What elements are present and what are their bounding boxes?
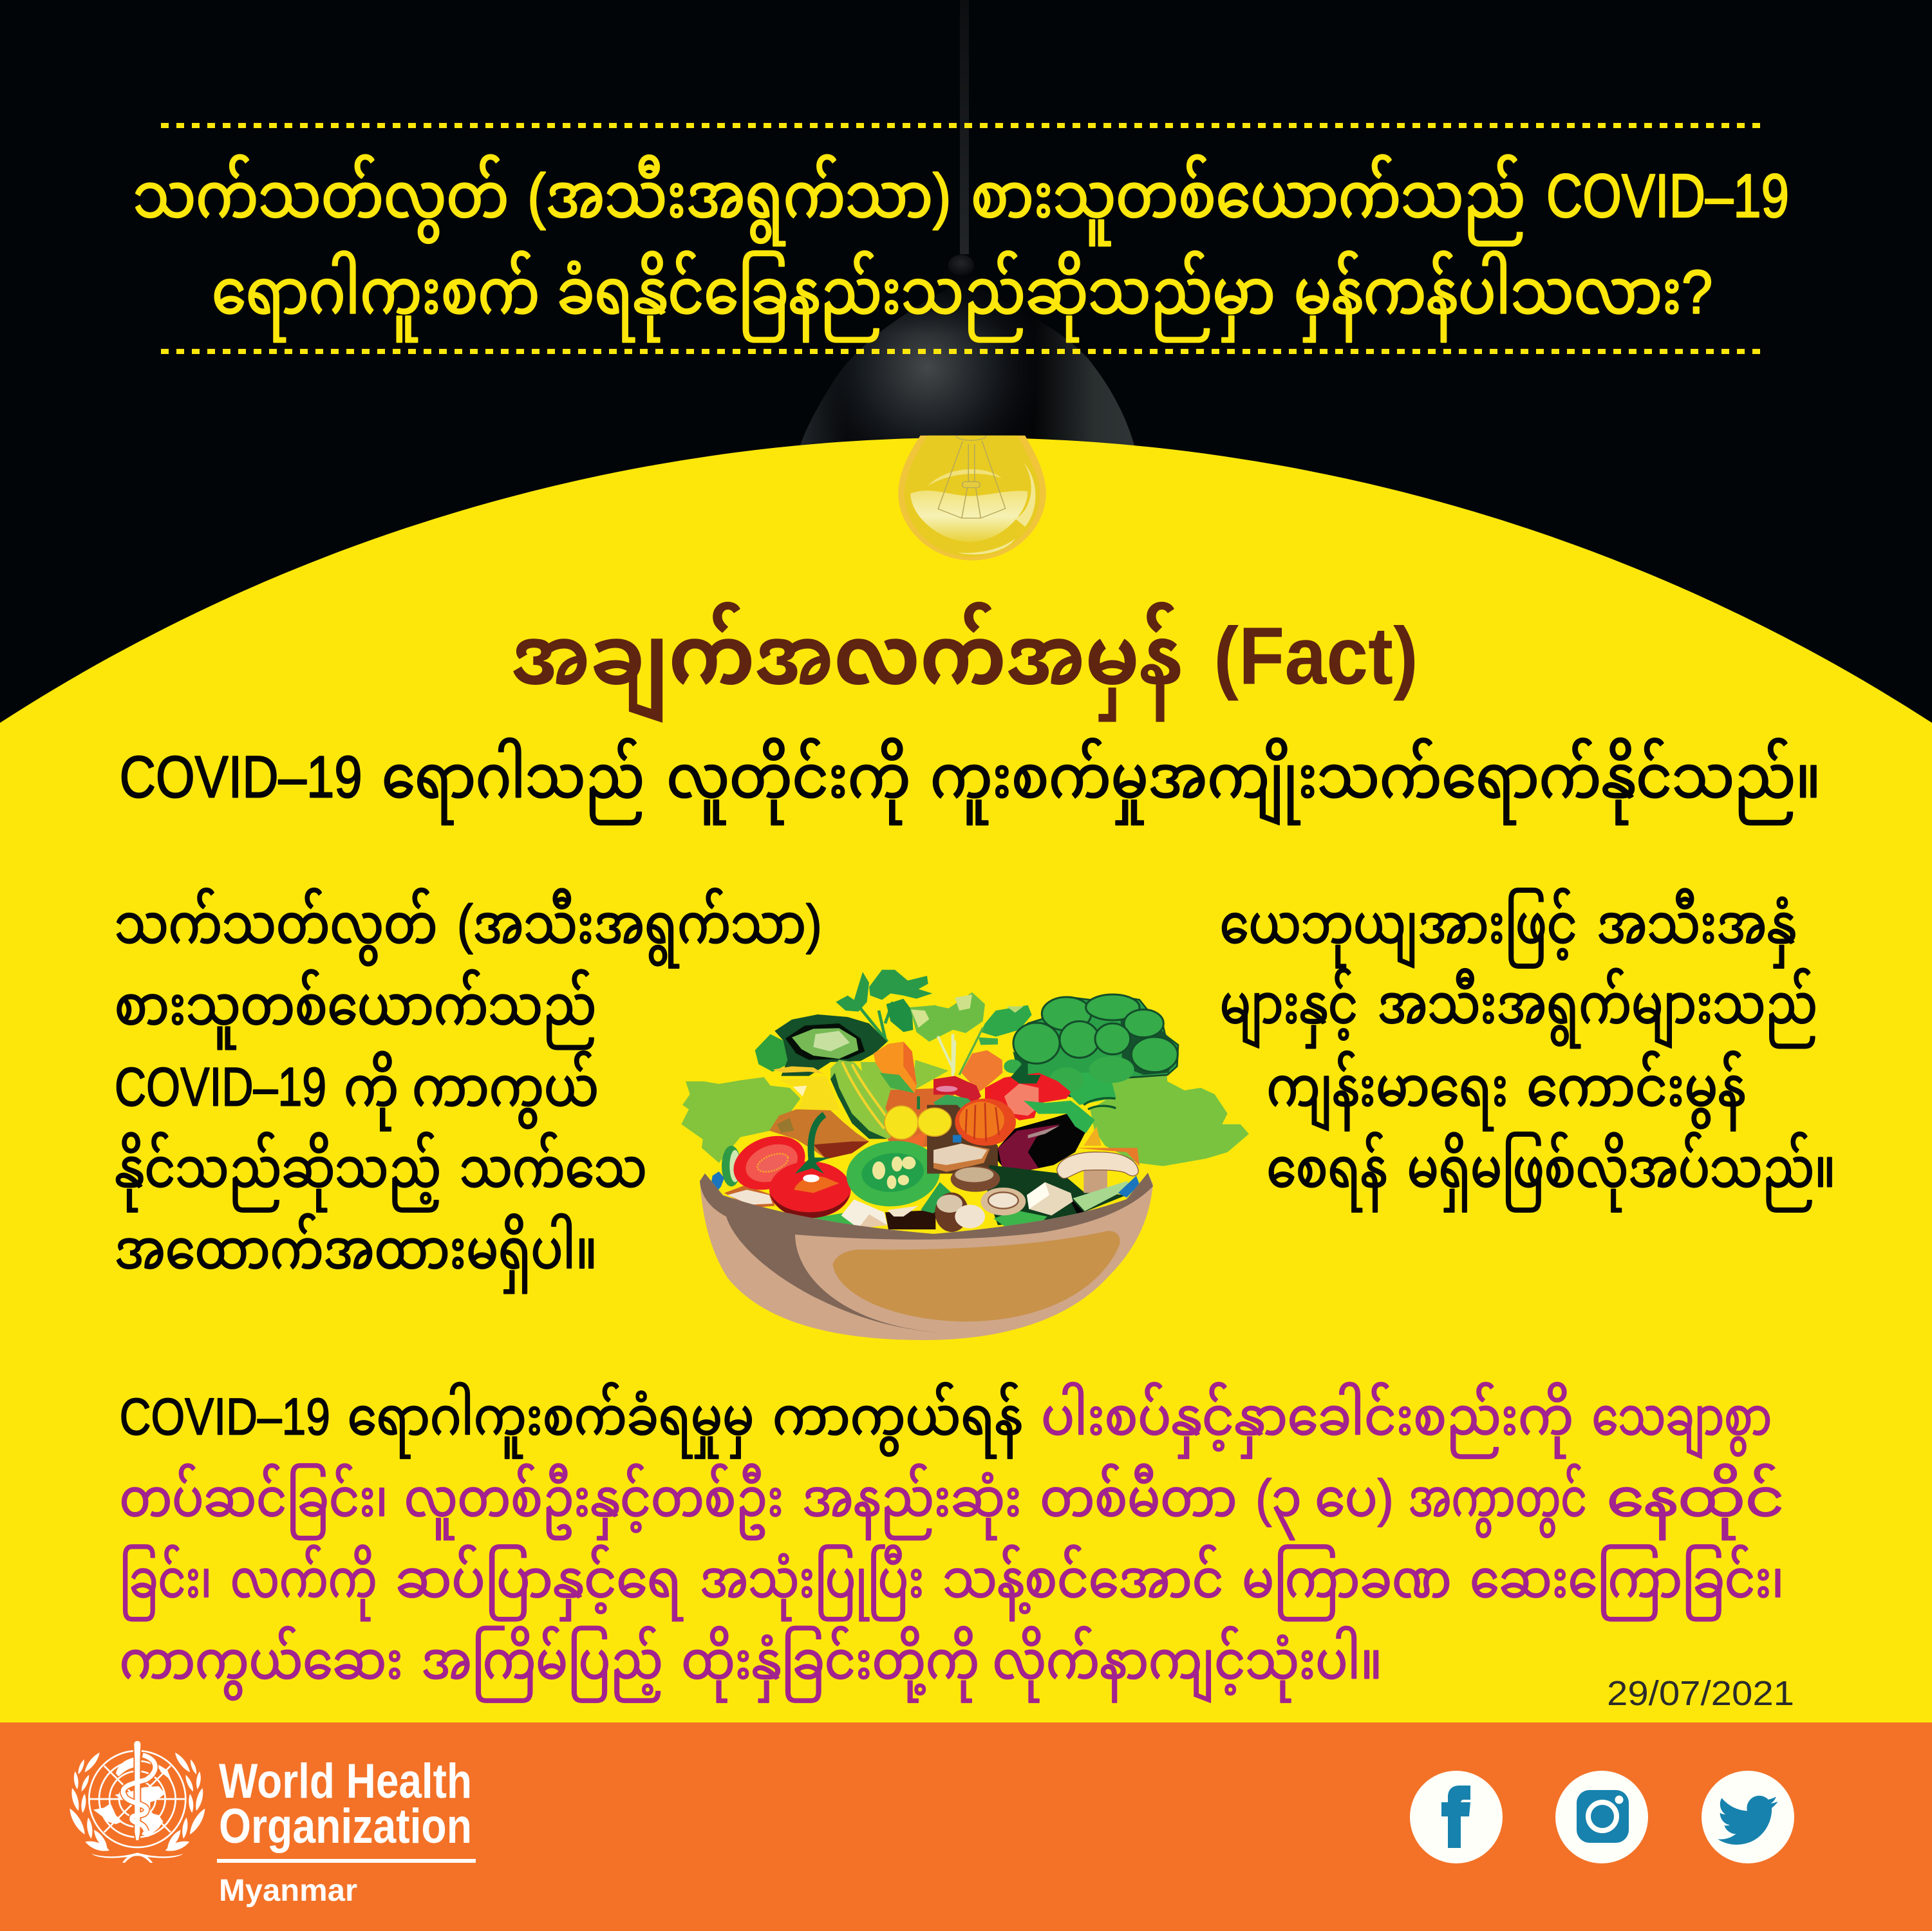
prevention paragraph: ပါးစပ်နှင့်နှာခေါင်းစည်းကို (1041, 1382, 1573, 1459)
onion (955, 1099, 1016, 1146)
prevention paragraph: ဆေးကြောခြင်း၊ (1470, 1545, 1784, 1621)
left text column: (အသီးအရွက်သာ) (457, 888, 822, 968)
left text column: သက်သတ်လွတ် (115, 888, 437, 966)
right text column: မရှိမဖြစ်လိုအပ်သည်။ (1407, 1132, 1836, 1212)
title: ခံရနိုင်ခြေနည်းသည်ဆိုသည်မှာ (557, 251, 1275, 341)
icon: facebook (1410, 1771, 1503, 1863)
prevention paragraph: ခြင်း၊ (120, 1545, 212, 1621)
icon: instagram (1555, 1771, 1648, 1863)
prevention paragraph: ကာကွယ်ရန် (773, 1382, 1023, 1459)
bowl (700, 1173, 1153, 1340)
prevention paragraph (120, 1382, 1784, 1703)
left text column: နိုင်သည်ဆိုသည့် (115, 1132, 441, 1212)
fact statement: COVID–19 (120, 745, 362, 810)
prevention paragraph: သန့်စင်အောင် (943, 1545, 1224, 1621)
vegetable sticks (1071, 1176, 1140, 1215)
heading: Fact (511, 602, 1418, 723)
mushroom left (933, 1144, 989, 1172)
right text column: အသီးအရွက်များသည် (1378, 968, 1817, 1049)
title: မှန်ကန်ပါသလား? (1294, 251, 1712, 341)
prevention paragraph: အကွာတွင် (1409, 1464, 1587, 1538)
left text column: စားသူတစ်ယောက်သည် (115, 969, 596, 1049)
title: (အသီးအရွက်သာ) (527, 155, 952, 245)
prevention paragraph: နေထိုင် (1607, 1464, 1784, 1540)
right text column: အသီးအနှံ (1597, 888, 1796, 968)
right text column: များနှင့် (1220, 968, 1358, 1049)
prevention paragraph: လက်ကို (230, 1545, 377, 1621)
carrot (874, 1041, 917, 1093)
globe (89, 1751, 185, 1847)
fact statement: ရောဂါသည် (382, 738, 644, 825)
fact statement: လူတိုင်းကို (666, 738, 910, 825)
centre backing (882, 1088, 959, 1148)
radish (933, 1076, 981, 1110)
right text column (1220, 888, 1836, 1212)
salad right half (918, 993, 1249, 1232)
title: ရောဂါကူးစက် (212, 251, 539, 341)
right text column: စေရန် (1266, 1132, 1387, 1212)
orange pepper (961, 1050, 1002, 1092)
laurel wreath (67, 1751, 208, 1863)
small mushrooms (935, 1166, 1026, 1232)
left text column: ကို ကာကွယ် (344, 1050, 599, 1130)
prevention paragraph: လူတစ်ဦးနှင့်တစ်ဦး (404, 1464, 783, 1540)
WHO wordmark (217, 1754, 476, 1908)
zucchini (830, 1060, 890, 1139)
yellow pepper (779, 1076, 840, 1110)
title: သက်သတ်လွတ် (133, 155, 509, 243)
filling (773, 1210, 858, 1228)
prevention paragraph: ရောဂါကူးစက်ခံရမှုမှ (348, 1382, 754, 1459)
date: 29/07/2021 (1607, 1674, 1794, 1713)
green filling (993, 1210, 1047, 1226)
parsley (836, 970, 932, 1041)
red pepper (985, 1062, 1071, 1121)
basil leaf (910, 1005, 966, 1041)
right lettuce (1090, 1068, 1249, 1166)
whole tomato (769, 1115, 851, 1218)
salad bowl illustration (681, 970, 1249, 1340)
tofu cube (1027, 1182, 1073, 1215)
WHO wordmark: Organization (219, 1799, 472, 1854)
lamp shade (800, 254, 1135, 447)
dark filling (987, 1165, 1127, 1225)
tofu cubes (841, 1199, 935, 1229)
title: COVID–19 (1546, 162, 1789, 230)
yellow lit area (0, 438, 1932, 1725)
prevention paragraph: အသုံးပြုပြီး (700, 1545, 924, 1621)
left text column (115, 888, 822, 1293)
light bulb (898, 436, 1046, 561)
WHO wordmark: World Health (219, 1754, 472, 1809)
potato (769, 1109, 869, 1159)
green pepper slice (844, 1137, 952, 1213)
left text column: COVID–19 (115, 1056, 326, 1117)
prevention paragraph: ကာကွယ်ဆေး (120, 1627, 403, 1701)
fact statement (120, 738, 1821, 825)
prevention paragraph: အကြိမ်ပြည့် (422, 1627, 663, 1703)
title: စားသူတစ်ယောက်သည် (971, 155, 1525, 245)
lamp cord (960, 0, 969, 254)
mushroom right (1057, 1148, 1140, 1193)
icon: twitter (1702, 1771, 1794, 1863)
prevention paragraph: ဆပ်ပြာနှင့်ရေ (395, 1545, 684, 1621)
lemons (885, 1096, 952, 1152)
prevention paragraph: တပ်ဆင်ခြင်း၊ (120, 1464, 388, 1540)
prevention paragraph: (၃ ပေ) (1255, 1469, 1394, 1540)
heading: Fact: အချက်အလက်အမှန် (511, 602, 1183, 723)
tomato half (726, 1126, 812, 1199)
eggplant (998, 1098, 1116, 1172)
right text column: ယေဘုယျအားဖြင့် (1220, 888, 1577, 969)
cucumber slice and rim scraps (711, 1146, 774, 1208)
cabbage (755, 1014, 887, 1076)
right text column: ကျန်းမာရေး (1266, 1050, 1508, 1131)
staff and serpent (116, 1740, 155, 1841)
continents (93, 1764, 172, 1837)
right text column: ကောင်းမွန် (1526, 1050, 1746, 1130)
prevention paragraph: ထိုးနှံခြင်းတို့ကို လိုက်နာကျင့်သုံးပါ။ (681, 1627, 1382, 1703)
prevention paragraph: မကြာခဏ (1242, 1545, 1452, 1621)
prevention paragraph: သေချာစွာ (1592, 1388, 1772, 1459)
WHO wordmark: Myanmar (219, 1874, 357, 1908)
fact statement: ကူးစက်မှုအကျိုးသက်ရောက်နိုင်သည်။ (930, 738, 1821, 825)
prevention paragraph: အနည်းဆုံး (802, 1464, 1022, 1540)
prevention paragraph: တစ်မီတာ (1040, 1464, 1237, 1527)
left text column: အထောက်အထားမရှိပါ။ (115, 1213, 597, 1293)
dotted rule: bottom (161, 349, 1763, 354)
WHO emblem (67, 1740, 208, 1863)
salad left half (681, 970, 966, 1229)
lemon edge and blue accent (918, 1108, 961, 1143)
background leaves (861, 1060, 948, 1114)
left lettuce (681, 1077, 800, 1163)
centre backing (927, 1105, 998, 1173)
prevention paragraph: COVID–19 (120, 1388, 330, 1446)
orange footer band (0, 1722, 1932, 1931)
basil leaves (933, 993, 1032, 1076)
dotted rule: top (161, 123, 1763, 128)
broccoli (1004, 994, 1178, 1105)
heading: Fact: (Fact) (1214, 611, 1418, 702)
left text column: သက်သေ (460, 1132, 647, 1199)
title (133, 155, 1789, 341)
